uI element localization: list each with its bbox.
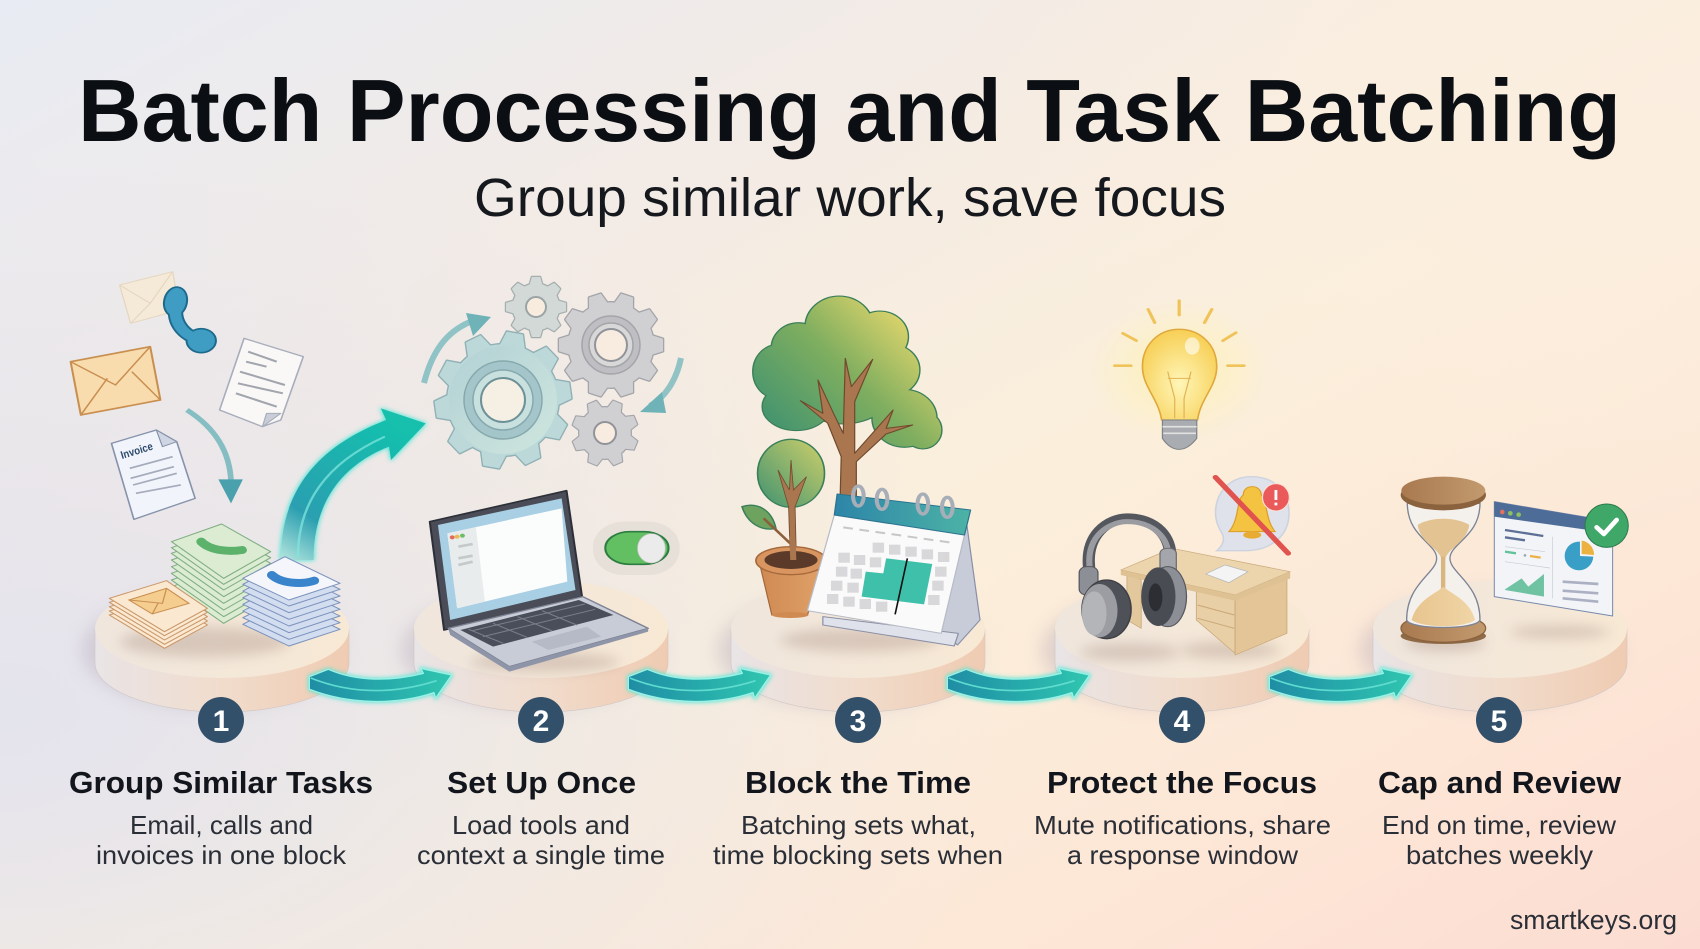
description: time blocking sets when bbox=[713, 840, 1003, 870]
icon: hourglass bbox=[1401, 477, 1486, 644]
number badge 2: 2 bbox=[533, 705, 549, 738]
description bbox=[417, 810, 665, 870]
description: Email, calls and bbox=[130, 810, 313, 840]
icon: desk bbox=[1121, 548, 1290, 655]
icon: paper document bbox=[220, 338, 303, 427]
object shadows on platforms bbox=[120, 625, 1610, 672]
description: End on time, review bbox=[1382, 810, 1616, 840]
step 3 illustration bbox=[742, 297, 980, 646]
step 1 text bbox=[69, 697, 373, 870]
description: a response window bbox=[1067, 840, 1298, 870]
icon: toggle switch bbox=[593, 522, 680, 575]
step 2 text bbox=[417, 697, 665, 870]
icon: dashboard window bbox=[1494, 502, 1613, 616]
icon: light bulb bbox=[1089, 300, 1269, 449]
stack: blue phone cards bbox=[243, 557, 340, 646]
icon: right gray gear bbox=[545, 279, 677, 411]
icon: headphones bbox=[1079, 518, 1187, 639]
number badge 1: 1 bbox=[213, 705, 229, 738]
number badge 5 bbox=[1476, 697, 1522, 743]
subtitle: Group similar work, save focus bbox=[474, 168, 1226, 228]
arrow: connector from step 1 to 2 bbox=[309, 668, 452, 702]
step 3 text bbox=[713, 697, 1003, 870]
icon: top small gear bbox=[506, 277, 566, 337]
icon: laptop bbox=[430, 491, 648, 672]
icon: small pale envelope bbox=[120, 272, 180, 323]
description: Load tools and bbox=[452, 810, 630, 840]
icon: muted notification bell bbox=[1216, 477, 1289, 553]
description: invoices in one block bbox=[96, 840, 347, 870]
heading: cap and review: Cap and Review bbox=[1378, 765, 1622, 800]
step 4 illustration bbox=[1079, 300, 1290, 655]
step 5 illustration bbox=[1401, 477, 1628, 644]
number badge 3: 3 bbox=[850, 705, 866, 738]
icon: green check badge bbox=[1585, 504, 1628, 547]
arrow: curved arrow left bbox=[424, 313, 491, 383]
number badge 4 bbox=[1159, 697, 1205, 743]
icon: large envelope bbox=[71, 347, 160, 415]
description: Mute notifications, share bbox=[1034, 810, 1331, 840]
invoice label: Invoice bbox=[119, 441, 154, 462]
icon: large tree bbox=[753, 297, 941, 503]
stack: envelope cards bbox=[109, 581, 207, 648]
description bbox=[1034, 810, 1331, 870]
step 2 illustration: gears bbox=[424, 277, 681, 479]
number badge 3 bbox=[835, 697, 881, 743]
heading: group similar tasks: Group Similar Tasks bbox=[69, 765, 373, 800]
icon: bottom small gear bbox=[562, 390, 648, 476]
number badge 1 bbox=[198, 697, 244, 743]
step 4 text bbox=[1034, 697, 1331, 870]
heading: protect the focus: Protect the Focus bbox=[1047, 765, 1317, 800]
stack: green call cards bbox=[171, 524, 271, 623]
step 1 illustration: tasks sorted into stacks bbox=[71, 272, 426, 648]
arrow: connector from step 2 to 3 bbox=[628, 668, 771, 702]
icon: calendar bbox=[807, 486, 980, 646]
description bbox=[96, 810, 347, 870]
platforms bbox=[82, 580, 1627, 712]
icon: potted plant bbox=[742, 439, 826, 618]
arrow: connector from step 4 to 5 bbox=[1269, 668, 1412, 702]
title: Batch Processing and Task Batching bbox=[78, 61, 1621, 160]
description bbox=[713, 810, 1003, 870]
step 2 illustration: laptop and toggle bbox=[430, 491, 680, 672]
description: Batching sets what, bbox=[741, 810, 976, 840]
step 5 text bbox=[1378, 697, 1622, 870]
number badge 5: 5 bbox=[1491, 705, 1507, 738]
description: batches weekly bbox=[1406, 840, 1593, 870]
arrow: connector from step 3 to 4 bbox=[947, 668, 1090, 702]
description bbox=[1382, 810, 1616, 870]
icon: blue phone bbox=[162, 286, 216, 353]
heading: block the time: Block the Time bbox=[745, 765, 971, 800]
heading: set up once: Set Up Once bbox=[447, 765, 636, 800]
number badge 2 bbox=[518, 697, 564, 743]
number badge 4: 4 bbox=[1174, 705, 1191, 738]
arrow: curved arrow right bbox=[640, 358, 681, 413]
icon: large teal gear bbox=[424, 321, 582, 479]
description: context a single time bbox=[417, 840, 665, 870]
arrow: large teal curved arrow bbox=[281, 408, 426, 560]
icon: invoice document bbox=[111, 430, 195, 519]
website credit: smartkeys.org bbox=[1510, 905, 1677, 935]
arrow: tasks falling into stacks bbox=[187, 410, 243, 503]
